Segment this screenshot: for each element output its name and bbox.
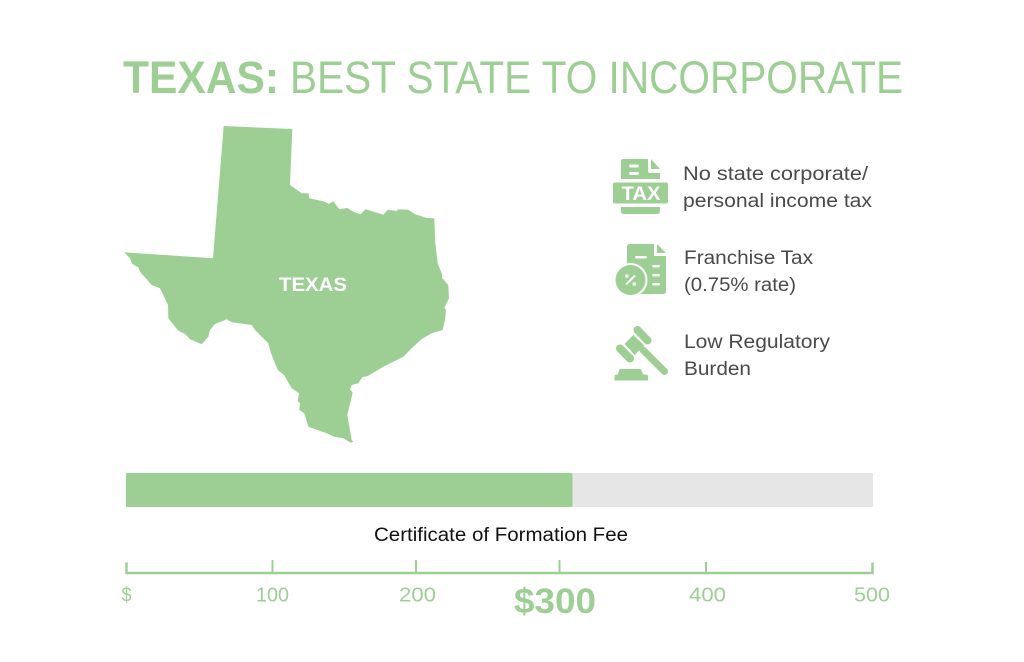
icon: tax document: TAX (622, 183, 660, 205)
axis labels: $ (122, 584, 132, 606)
map: Texas (124, 126, 449, 443)
text: No state corporate/ (683, 164, 869, 185)
axis labels (122, 584, 890, 606)
bar: fee value (126, 473, 572, 507)
axis labels: 200 (399, 584, 436, 606)
title: BEST STATE TO INCORPORATE (290, 52, 903, 103)
highlighted value: $300 (514, 582, 596, 621)
benefit: franchise tax (614, 244, 814, 297)
axis labels: 500 (854, 584, 890, 606)
icon: percent document (614, 244, 666, 297)
text: (0.75% rate) (684, 275, 796, 296)
icon: gavel (614, 330, 664, 380)
axis labels: 100 (256, 584, 289, 606)
axis (122, 560, 890, 621)
text (683, 164, 873, 212)
title: TEXAS: (123, 52, 279, 103)
bar chart: fee progress (126, 473, 873, 507)
benefit: no income tax (613, 159, 873, 214)
text (684, 248, 814, 296)
axis labels: 400 (689, 584, 726, 606)
text: Low Regulatory (684, 332, 831, 353)
benefit: low regulatory burden (614, 330, 831, 380)
icon: tax document (613, 159, 668, 214)
text: Franchise Tax (684, 248, 814, 269)
text: Burden (684, 359, 751, 380)
chart label: Certificate of Formation Fee (374, 525, 628, 546)
map label: TEXAS (279, 274, 347, 296)
text: personal income tax (683, 191, 873, 212)
text (684, 332, 831, 380)
